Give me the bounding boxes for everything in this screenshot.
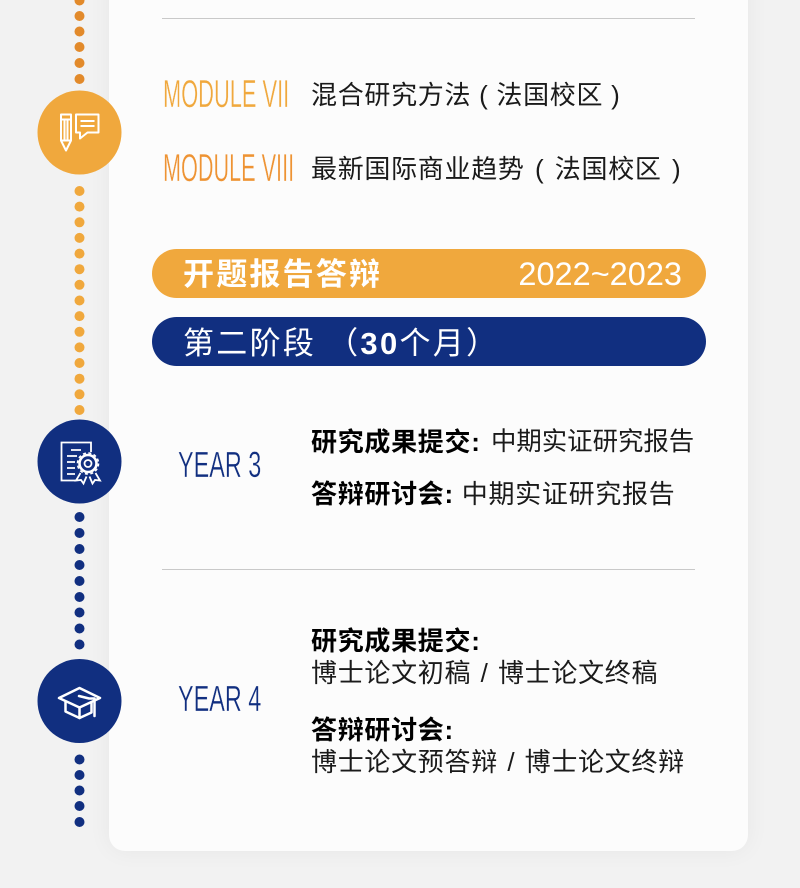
icon: graduation cap [38, 659, 122, 743]
timeline: dots and icon circles [38, 0, 122, 827]
text: module VIII title: 最新国际商业趋势 ( 法国校区 ) [311, 154, 681, 184]
text: module VII title: 混合研究方法 ( 法国校区 ) [311, 80, 620, 110]
text: year 3 submission: 研究成果提交: [311, 427, 481, 457]
banner: second stage [152, 317, 706, 366]
text: year 3 defense: 答辩研讨会: 中期实证研究报告 [311, 479, 675, 509]
banner years: 2022~2023 [518, 256, 682, 292]
label: year 4: YEAR 4 [178, 678, 261, 719]
dots: blue run after year 3 [74, 512, 84, 650]
text: year 4 defense: 答辩研讨会: [311, 715, 454, 745]
dots: bottom blue run [74, 754, 84, 827]
label: year 3: YEAR 3 [178, 444, 261, 485]
text: 中期实证研究报告 [491, 428, 694, 456]
text: year 4 defense [311, 715, 685, 777]
dots: top orange run [74, 0, 84, 84]
text: year 4 defense: 博士论文预答辩 / 博士论文终辩 [311, 747, 685, 777]
panel: white content card [109, 0, 748, 851]
banner: proposal defense [152, 249, 706, 298]
banner title: 开题报告答辩 [183, 257, 382, 292]
text: year 4 submission: 研究成果提交: [311, 626, 481, 656]
banner text: 第二阶段 （30个月） [183, 326, 499, 361]
icon: report with rosette [38, 420, 122, 504]
text: year 4 submission [311, 626, 658, 688]
label: module VIII: MODULE VIII [163, 147, 294, 190]
text: year 4 submission: 博士论文初稿 / 博士论文终稿 [311, 658, 658, 688]
icon: pencil and speech bubble [38, 90, 122, 174]
label: module VII: MODULE VII [163, 73, 289, 116]
text: year 3 submission [311, 427, 694, 457]
dots: middle orange run [74, 186, 84, 415]
